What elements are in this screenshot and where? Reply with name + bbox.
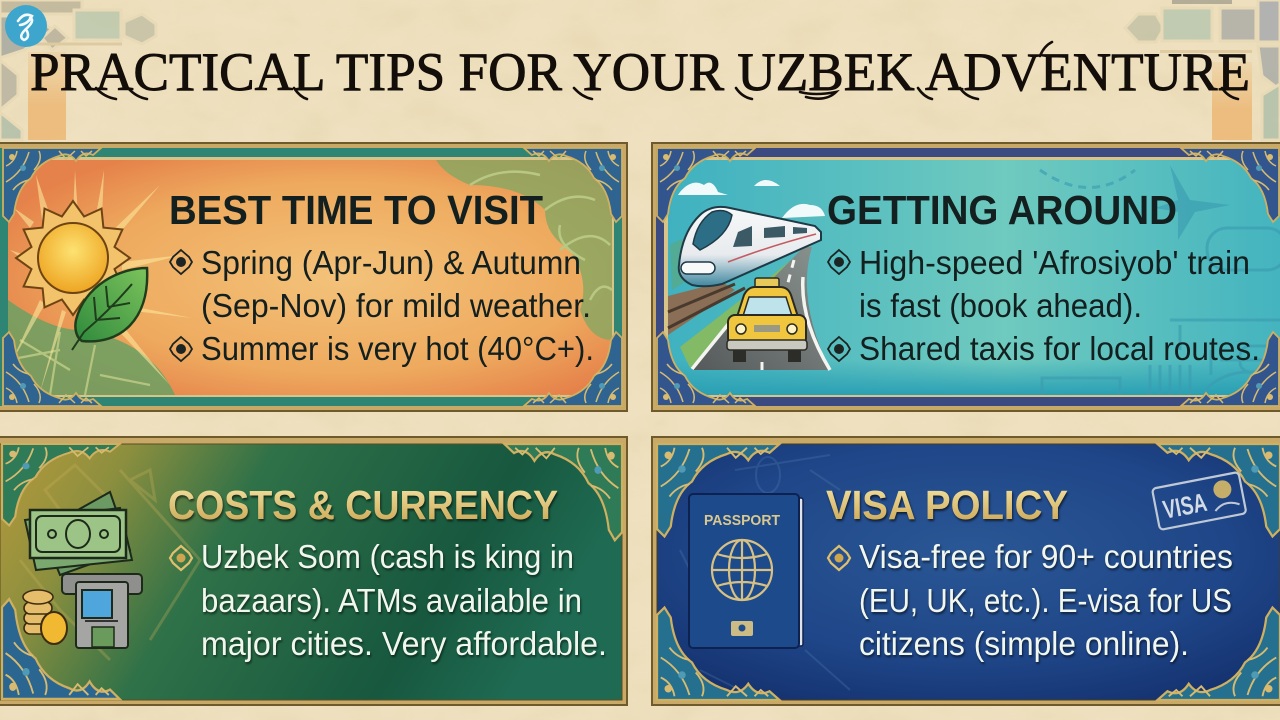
body text bbox=[859, 538, 1233, 662]
body text: bazaars). ATMs available in bbox=[201, 582, 582, 619]
heading: VISA POLICY bbox=[826, 482, 1068, 528]
title: PRACTICAL TIPS FOR YOUR UZBEK ADVENTURE bbox=[30, 42, 1250, 102]
bullet list: Spring (Apr-Jun) & Autumn bbox=[201, 244, 581, 281]
body text: (EU, UK, etc.). E-visa for US bbox=[859, 582, 1232, 619]
icon: visa stamp bbox=[1152, 472, 1246, 530]
corner ornaments bbox=[657, 148, 1279, 406]
heading: GETTING AROUND bbox=[827, 187, 1177, 233]
icon: clouds bbox=[678, 180, 825, 218]
bullet bbox=[170, 538, 607, 662]
logo badge bbox=[5, 5, 47, 47]
body text: Uzbek Som (cash is king in bbox=[201, 538, 574, 575]
icon: passport bbox=[689, 494, 803, 648]
icon: train and taxi bbox=[668, 180, 830, 370]
body text: major cities. Very affordable. bbox=[201, 625, 607, 662]
panel: getting around bbox=[652, 143, 1280, 411]
corner ornaments bbox=[657, 444, 1280, 700]
decorative tile pattern: top left bbox=[0, 0, 156, 140]
icon: sun with leaf bbox=[10, 170, 192, 392]
icon: visa stamp: VISA bbox=[1160, 487, 1209, 525]
panel: visa policy bbox=[652, 437, 1280, 705]
bullet list: High-speed 'Afrosiyob' train bbox=[859, 244, 1250, 281]
bullet list: Summer is very hot (40°C+). bbox=[201, 330, 594, 367]
body text: Visa-free for 90+ countries bbox=[859, 538, 1233, 575]
bullet list: is fast (book ahead). bbox=[859, 287, 1142, 324]
body text: citizens (simple online). bbox=[859, 625, 1189, 662]
icon: passport: PASSPORT bbox=[704, 512, 780, 529]
panel: costs and currency bbox=[0, 437, 627, 705]
heading: BEST TIME TO VISIT bbox=[169, 187, 543, 233]
bullet list: Shared taxis for local routes. bbox=[859, 330, 1260, 367]
icon: cash, ATM and coins bbox=[23, 492, 142, 648]
body text bbox=[201, 538, 607, 662]
bullet list: (Sep-Nov) for mild weather. bbox=[201, 287, 591, 324]
decorative tile pattern: top right bbox=[1125, 0, 1280, 140]
bullet list bbox=[828, 244, 1260, 367]
heading: COSTS & CURRENCY bbox=[168, 482, 558, 528]
icon: yellow taxi bbox=[727, 278, 807, 362]
faint travel motifs bbox=[1040, 165, 1280, 395]
corner ornaments bbox=[2, 444, 622, 540]
corner ornaments bbox=[3, 148, 622, 406]
bullet list bbox=[170, 244, 594, 367]
panel: best time to visit bbox=[0, 143, 627, 411]
bullet bbox=[828, 538, 1233, 662]
